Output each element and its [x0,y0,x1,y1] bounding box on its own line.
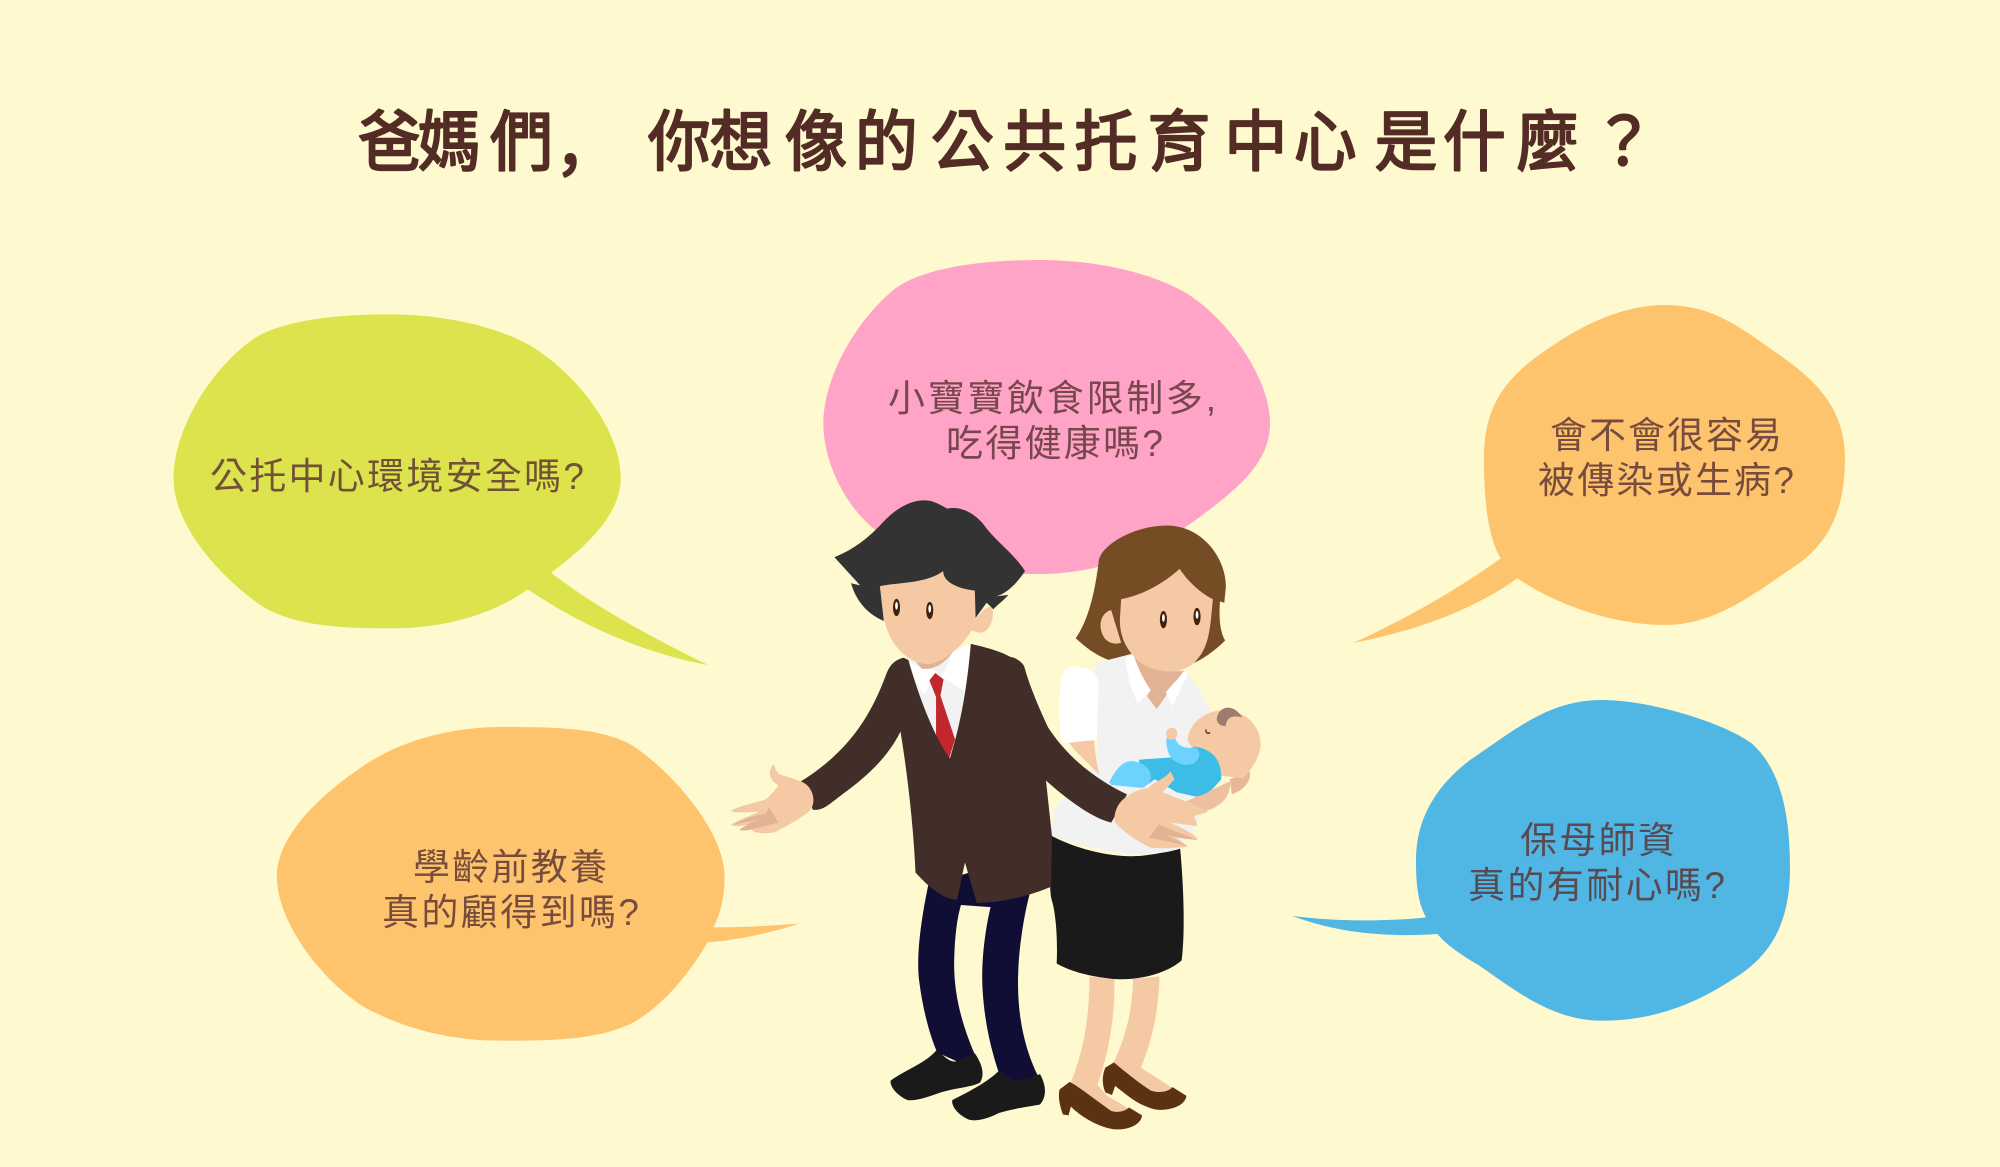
baby body [1139,747,1221,797]
father collar [908,644,970,695]
baby hair [1217,708,1243,726]
mother forearm [1069,740,1099,775]
panel: left orange speech bubble [277,727,800,1041]
father shoes [891,1050,1045,1120]
bubble shape: right orange [1354,305,1845,643]
text: pink bubble: 小寶寶飲食限制多, [888,378,1216,419]
title: 爸媽們，你想像的公共托育中心是什麼？ [358,106,1655,203]
father neck [915,651,953,669]
father face [880,571,976,664]
text: green bubble: 公托中心環境安全嗎? [210,456,584,497]
panel: green speech bubble [174,314,708,665]
father jacket [801,644,1127,903]
mother supporting hand [1182,781,1230,814]
mother collar [1125,653,1188,706]
baby arm [1166,736,1199,765]
panel: blue speech bubble [1292,700,1790,1021]
bubble shape: blue [1292,700,1790,1021]
text: blue bubble: 保母師資 [1520,820,1675,861]
baby eye [1206,729,1210,733]
father trousers [918,870,1038,1083]
father right hand [1115,771,1208,848]
mother supporting arm [1230,771,1250,794]
father eyes [893,599,933,619]
mother sleeve [1059,667,1099,743]
mother ear [1101,610,1121,644]
father shirt [908,644,970,758]
figure: baby [1109,708,1261,814]
text: left orange bubble: 真的顧得到嗎? [382,892,639,933]
baby hand [1166,728,1177,740]
text: right orange bubble: 被傳染或生病? [1538,460,1794,501]
panel: right orange speech bubble [1354,305,1845,643]
baby head [1188,710,1261,778]
father hair [834,500,1025,621]
text: right orange bubble: 會不會很容易 [1550,415,1782,456]
mother shoes [1059,1062,1186,1129]
baby leg [1109,761,1151,788]
mother blouse [1051,653,1214,854]
text: blue bubble: 真的有耐心嗎? [1468,865,1725,906]
father tie [929,673,955,758]
figure: mother [1050,526,1226,1129]
bubble shape: pink [823,260,1270,574]
bubble shape: left orange [277,727,800,1041]
figure: father [731,500,1208,1120]
mother face [1120,569,1213,672]
bubble shape: green [174,314,708,665]
mother eyes [1160,608,1201,628]
text: pink bubble: 吃得健康嗎? [946,423,1163,464]
mother neck [1133,653,1184,709]
mother legs [1070,977,1173,1117]
mother hair [1076,526,1226,664]
text: left orange bubble: 學齡前教養 [413,847,607,888]
father left hand [731,764,813,833]
mother skirt [1050,836,1184,979]
illustration: parents with baby [731,500,1261,1129]
panel: pink speech bubble [823,260,1270,574]
father ear [971,607,993,633]
